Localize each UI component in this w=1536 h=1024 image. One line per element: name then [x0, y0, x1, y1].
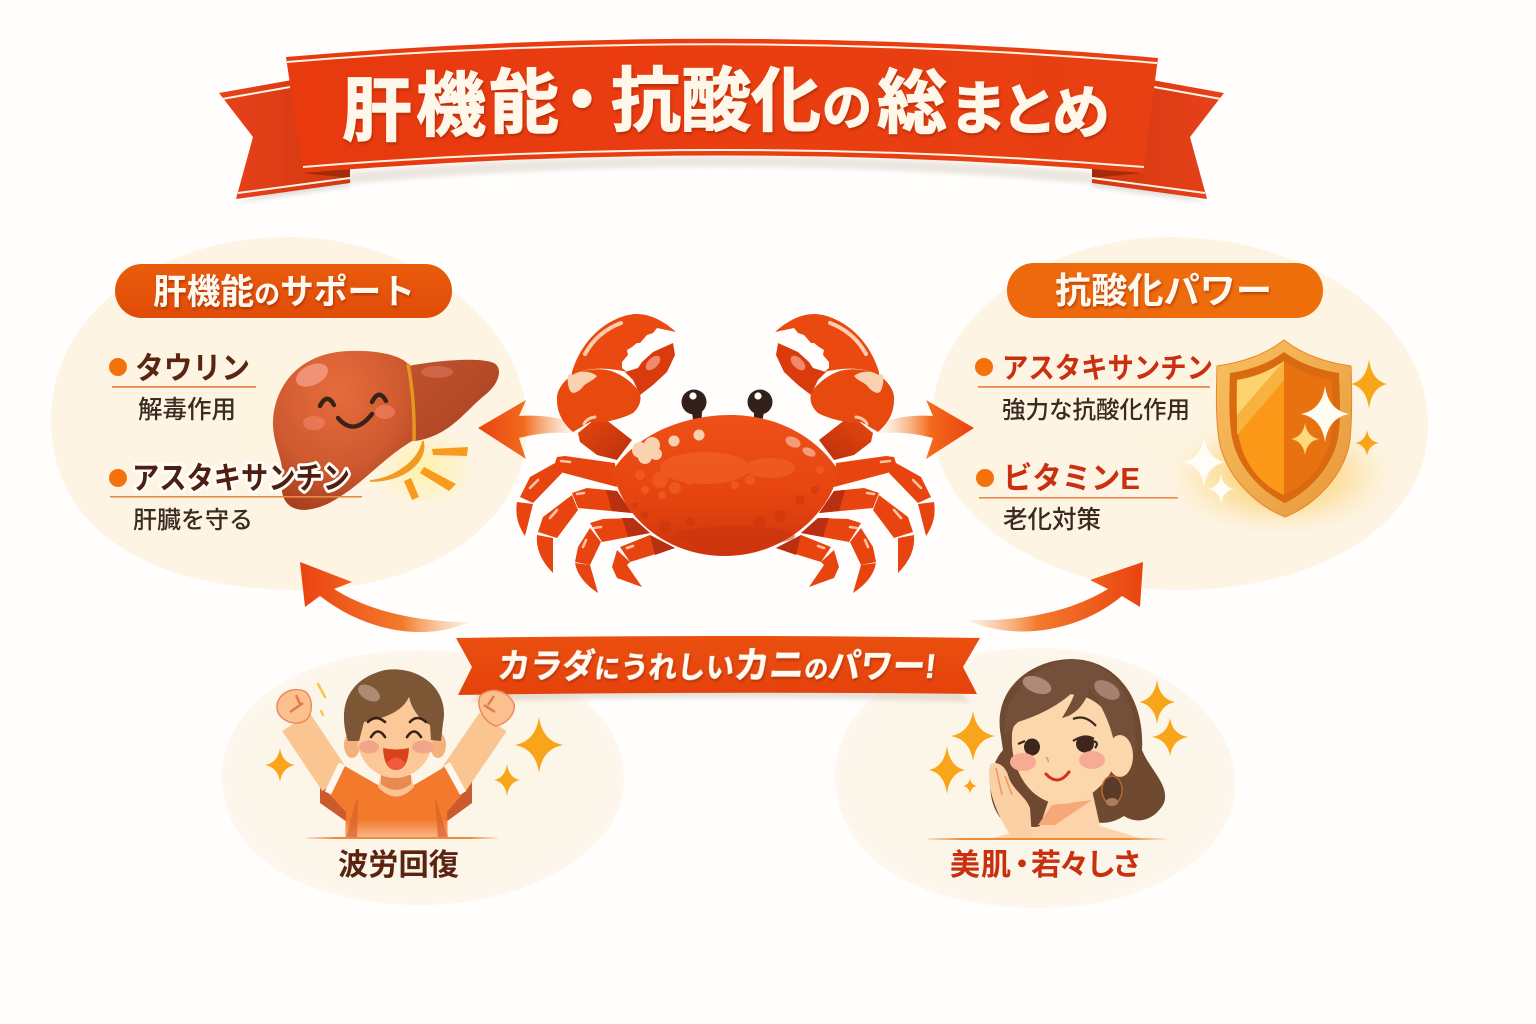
claw upper pincer — [572, 314, 676, 375]
leg 1 — [516, 456, 617, 536]
banner left tail — [219, 80, 350, 199]
arrow: curved to liver panel — [300, 562, 470, 632]
title text: 化 — [751, 62, 821, 140]
sparkles — [265, 717, 563, 796]
item: taurine: 解毒作用 — [138, 396, 236, 424]
boy arms — [296, 722, 493, 782]
item: astaxanthin: アスタキサンチン — [1002, 352, 1213, 385]
icon: smiling liver — [273, 351, 499, 510]
label: beauty and youth: 若 — [1031, 849, 1061, 882]
boy neck — [378, 775, 414, 796]
title text: と — [1001, 79, 1057, 142]
claw arm — [578, 415, 632, 460]
panel heading: liver support — [115, 264, 452, 318]
label: beauty and youth: さ — [1112, 849, 1142, 882]
leg highlights — [530, 461, 633, 548]
crab shell mottling — [632, 430, 824, 546]
item: astaxanthin liver: アスタキサンチン — [132, 461, 350, 496]
title text: 総 — [877, 64, 947, 142]
crab — [516, 314, 935, 593]
ribbon: body-friendly crab power — [456, 636, 980, 702]
crab body — [613, 415, 838, 556]
sparkles — [1183, 359, 1387, 504]
icon: golden shield — [1162, 340, 1398, 537]
item: astaxanthin: 強力な抗酸化作用 — [1002, 397, 1190, 424]
crab left half: claw and legs — [516, 314, 676, 593]
woman neck and shoulders — [992, 790, 1140, 838]
title text: ・ — [547, 62, 617, 140]
panel heading: antioxidant power — [1007, 263, 1323, 318]
boy left fist — [277, 690, 311, 723]
title banner — [219, 39, 1224, 203]
arrow: curved to antioxidant panel — [967, 562, 1143, 631]
title text: 酸 — [681, 62, 751, 140]
woman eyes — [1024, 738, 1040, 756]
illustration: smiling woman — [929, 659, 1188, 838]
label: beauty and youth: 々 — [1059, 849, 1089, 882]
title text: 肝 — [342, 72, 412, 150]
item: astaxanthin — [975, 352, 1213, 424]
panel heading: liver support: 肝機能のサポート — [153, 273, 415, 312]
woman hair back — [990, 659, 1165, 827]
arrow: crab to shield — [878, 400, 974, 459]
boy right fist over ribbon — [479, 690, 514, 726]
item: taurine: タウリン — [135, 351, 250, 386]
panel: liver support — [51, 237, 527, 590]
leg 4 — [612, 535, 675, 587]
banner main band — [286, 39, 1158, 173]
item: vitamin E: ビタミンE — [1003, 461, 1140, 496]
boy back sleeves — [320, 780, 472, 822]
panel heading: antioxidant power: 抗酸化パワー — [1055, 270, 1272, 311]
panel: antioxidant power — [932, 237, 1428, 590]
item: astaxanthin liver — [109, 461, 362, 534]
crab right half: claw and legs — [775, 314, 935, 593]
title text: め — [1052, 81, 1110, 146]
title text: ま — [949, 77, 1007, 142]
title text: 抗 — [611, 62, 681, 140]
illustration: cheering boy — [265, 669, 563, 838]
claw wrist — [557, 369, 641, 432]
boy face — [368, 718, 426, 737]
label: beauty and youth: 肌 — [981, 849, 1011, 882]
leg 3 — [575, 518, 650, 593]
panel background — [932, 237, 1428, 590]
label: beauty and youth: 美 — [950, 849, 980, 882]
ribbon text: カラダにうれしいカニのパワー! — [496, 644, 938, 686]
woman cheeks and mouth — [1010, 753, 1036, 771]
panel background — [51, 237, 527, 590]
claw lower pincer — [625, 343, 675, 395]
bile duct — [370, 441, 424, 481]
title text: 機 — [416, 67, 486, 145]
woman bangs — [1004, 660, 1136, 757]
panel background — [222, 650, 624, 905]
item: vitamin E — [976, 461, 1178, 534]
title text: の — [822, 80, 872, 136]
item: astaxanthin liver: 肝臓を守る — [133, 507, 253, 534]
woman hand — [989, 763, 1032, 838]
liver face — [303, 395, 395, 430]
leg 2 — [537, 488, 632, 573]
sparkles — [929, 680, 1188, 794]
label: beauty and youth: し — [1086, 849, 1116, 882]
banner right tail — [1092, 80, 1224, 199]
boy cheer marks — [318, 684, 325, 715]
item: taurine — [109, 351, 256, 424]
panel background — [835, 648, 1235, 908]
boy shirt — [328, 765, 464, 838]
panel: fatigue recovery — [222, 650, 624, 905]
title text: 能 — [489, 64, 559, 142]
boy head — [344, 732, 360, 758]
label: beauty and youth: ・ — [1007, 849, 1037, 882]
arrow: crab to liver — [478, 400, 578, 459]
panel: beauty and youth — [835, 648, 1235, 908]
label: fatigue recovery: 波労回復 — [338, 849, 459, 882]
rays — [404, 447, 468, 500]
woman face — [1012, 694, 1118, 804]
woman ear and earring — [1107, 735, 1133, 777]
item: vitamin E: 老化対策 — [1003, 506, 1101, 534]
crab eyes — [682, 390, 772, 428]
